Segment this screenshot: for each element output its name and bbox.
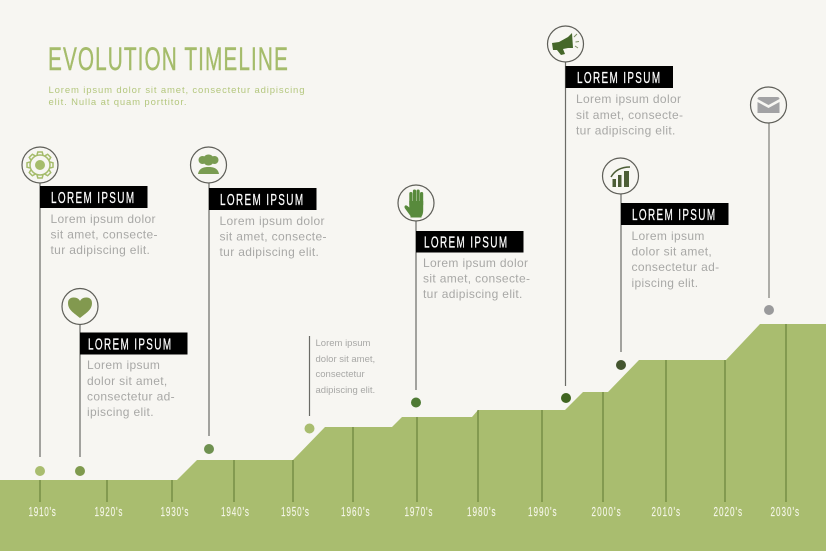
milestone: 2020s envelope: [750, 87, 786, 315]
subtitle: [48, 85, 304, 108]
milestone: 1910s heart: dolor sit amet,: [87, 374, 168, 388]
decade labels: 2020's: [714, 505, 742, 520]
subtitle: Lorem ipsum dolor sit amet, consectetur adipiscing: [48, 85, 304, 96]
decade labels: 1960's: [341, 505, 370, 520]
milestone: 1990s megaphone: LOREM IPSUM: [577, 69, 660, 87]
milestone: 1990s megaphone: tur adipiscing elit.: [576, 124, 676, 138]
decade labels: 2010's: [652, 505, 680, 520]
milestone: 1950s small text: [304, 336, 375, 434]
milestone: 1930s people: Lorem ipsum dolor: [220, 214, 325, 228]
milestone: 1930s people: tur adipiscing elit.: [220, 245, 319, 259]
icon: hand: [404, 190, 423, 218]
milestone: 1910s heart: ipiscing elit.: [87, 405, 154, 419]
milestone: 1950s small text: Lorem ipsum: [316, 338, 370, 349]
milestone: 2000s chart: consectetur ad-: [632, 260, 719, 274]
milestone: 2000s chart: LOREM IPSUM: [632, 206, 715, 224]
milestone: 1910s gear: tur adipiscing elit.: [50, 243, 150, 257]
decade labels: 1920's: [94, 505, 122, 520]
milestone: 2000s chart: dolor sit amet,: [632, 244, 712, 258]
milestone: 1960s hand: sit amet, consecte-: [423, 272, 530, 286]
decade labels: [28, 505, 799, 520]
decade labels: 1950's: [281, 505, 309, 520]
subtitle: elit. Nulla at quam porttitor.: [48, 97, 186, 108]
milestone: 2000s chart: Lorem ipsum: [632, 229, 705, 243]
milestone: 1910s heart: LOREM IPSUM: [88, 335, 171, 353]
icon: bars and arrow: [611, 167, 630, 187]
milestone: 1990s megaphone: sit amet, consecte-: [576, 108, 683, 122]
milestone: 1910s heart: Lorem ipsum: [87, 358, 160, 372]
decade labels: 1980's: [467, 505, 496, 520]
milestone: 1910s gear: [22, 147, 158, 476]
milestone: 1910s gear: sit amet, consecte-: [50, 228, 158, 242]
decade labels: 1940's: [221, 505, 249, 520]
milestone: 1950s small text: dolor sit amet,: [316, 354, 375, 365]
milestone: 1950s small text: consectetur: [316, 369, 365, 380]
stepped green area chart: [0, 324, 826, 551]
milestone: 1960s hand: Lorem ipsum dolor: [423, 256, 528, 270]
milestone: 1930s people: [190, 147, 327, 454]
icon: gear: [27, 152, 53, 178]
title: EVOLUTION TIMELINE: [48, 42, 288, 77]
decade labels: 2000's: [592, 505, 621, 520]
decade labels: 1970's: [404, 505, 432, 520]
icon: megaphone: [552, 33, 579, 55]
milestone: 1960s hand: LOREM IPSUM: [424, 233, 507, 251]
milestone: 1990s megaphone: Lorem ipsum dolor: [576, 92, 681, 106]
milestone: 1960s hand: [398, 185, 530, 408]
decade labels: 2030's: [770, 505, 799, 520]
milestone: 1990s megaphone: [548, 26, 683, 403]
milestone: 2000s chart: ipiscing elit.: [632, 276, 698, 290]
decade tick marks: [40, 324, 786, 502]
decade labels: 1910's: [28, 505, 56, 520]
milestone: 1950s small text: adipiscing elit.: [316, 385, 375, 396]
decade labels: 1990's: [528, 505, 557, 520]
milestone: 1910s heart: [62, 288, 188, 476]
milestone: 1910s gear: Lorem ipsum dolor: [50, 212, 156, 226]
icon: people: [198, 154, 219, 174]
milestone: 1910s heart: consectetur ad-: [87, 390, 175, 404]
milestone: 2000s chart: [602, 158, 728, 370]
milestone: 1910s gear: LOREM IPSUM: [51, 189, 134, 207]
milestone: 1930s people: sit amet, consecte-: [220, 230, 327, 244]
milestone: 1930s people: LOREM IPSUM: [220, 191, 303, 209]
icon: heart: [68, 298, 92, 318]
milestone: 1960s hand: tur adipiscing elit.: [423, 287, 523, 301]
icon: envelope: [758, 97, 780, 113]
decade labels: 1930's: [160, 505, 188, 520]
